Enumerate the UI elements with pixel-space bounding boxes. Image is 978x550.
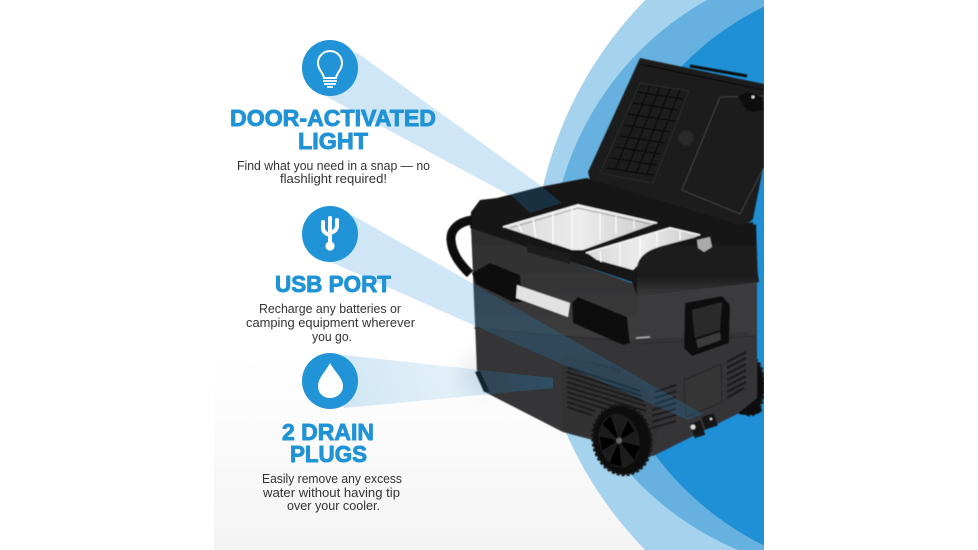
cooler body <box>471 226 757 456</box>
front vent panel <box>594 409 650 439</box>
description: Easily remove any excess <box>262 472 402 486</box>
left bracket <box>472 263 522 302</box>
lid right panel <box>682 96 764 214</box>
icon: light bulb <box>302 40 358 96</box>
left carry handle <box>451 220 472 274</box>
beam: drain plug <box>344 355 553 408</box>
lid grid tray <box>600 83 689 183</box>
heading: USB PORT <box>275 271 391 297</box>
description: flashlight required! <box>280 172 387 186</box>
heading: PLUGS <box>290 441 367 467</box>
cooler top rim <box>470 178 759 296</box>
service door <box>684 364 722 417</box>
description <box>237 159 430 186</box>
heading: DOOR-ACTIVATED <box>230 105 436 131</box>
description <box>262 472 402 513</box>
description: over your cooler. <box>287 499 380 513</box>
drain plug <box>475 371 490 392</box>
cooler lid <box>588 58 764 226</box>
side vent <box>727 352 746 398</box>
cooler product <box>451 58 764 480</box>
heading <box>282 419 374 467</box>
metal latch <box>697 237 712 252</box>
heading <box>230 105 436 154</box>
beam: usb port <box>331 215 703 420</box>
ground shadow <box>460 352 504 392</box>
rim corner <box>636 224 758 274</box>
power switch and port <box>701 413 718 430</box>
description: water without having tip <box>262 486 400 500</box>
lid clip <box>738 92 764 112</box>
description <box>246 302 415 344</box>
description: Find what you need in a snap — no <box>237 159 430 173</box>
description: camping equipment wherever <box>246 316 415 330</box>
icon: water drop <box>302 353 358 409</box>
description: you go. <box>312 330 352 344</box>
icon: usb <box>302 206 358 262</box>
right wire basket <box>586 228 700 270</box>
background panel <box>214 0 764 550</box>
heading: 2 DRAIN <box>282 419 374 445</box>
blue concentric arcs <box>533 0 764 550</box>
brand label: nomadiq <box>586 357 621 375</box>
back wheel <box>738 358 764 418</box>
aluminium tow handle <box>516 285 570 317</box>
feature: door-activated light <box>230 40 436 186</box>
beam: door light <box>327 52 562 213</box>
left wire basket <box>503 205 657 250</box>
feature: drain plugs <box>262 353 402 513</box>
front wheel <box>590 404 653 478</box>
side handle <box>684 296 730 356</box>
middle latch <box>527 247 570 264</box>
feature: usb port <box>246 206 415 344</box>
description: Recharge any batteries or <box>259 302 401 316</box>
heading: LIGHT <box>298 128 368 154</box>
lid round button <box>678 130 694 146</box>
right bracket <box>572 297 630 345</box>
